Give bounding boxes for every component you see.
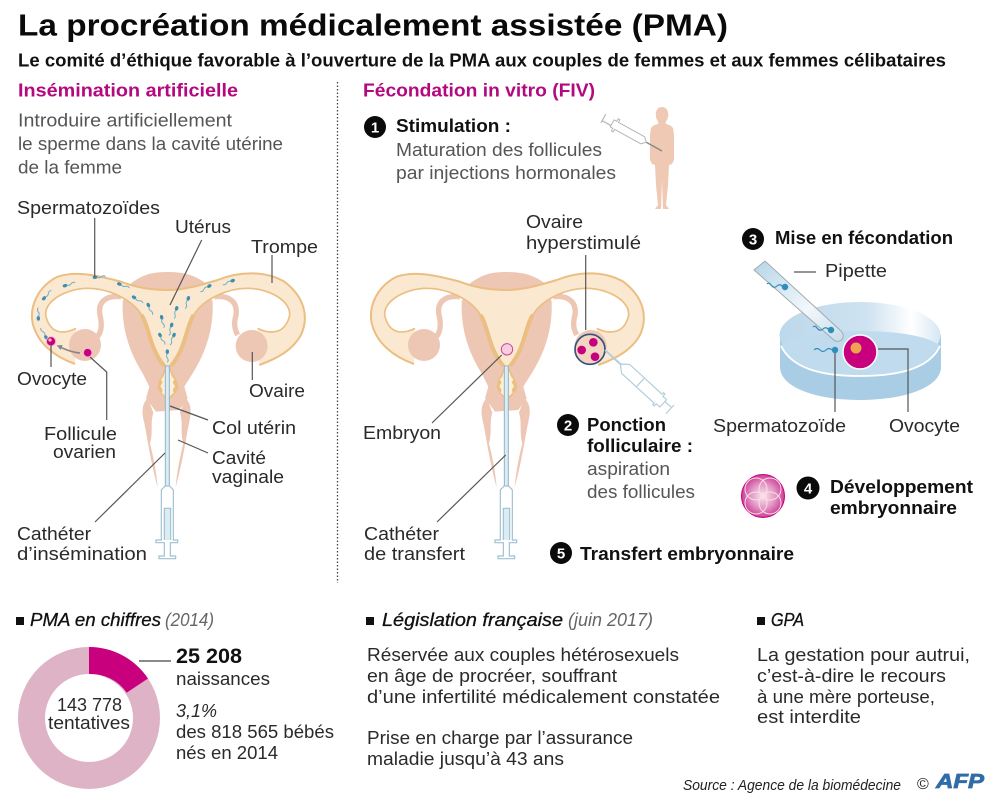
leader lines: insémination — [51, 218, 272, 522]
heading: législation française: (juin 2017) — [568, 610, 653, 630]
step 4: développement embryonnaire: embryonnaire — [830, 497, 957, 518]
heading: insémination artificielle: Insémination artificielle — [18, 80, 238, 100]
text block: législation: Réservée aux couples hétérosexuels — [367, 644, 679, 665]
labels: insémination diagram: Ovocyte — [17, 368, 87, 389]
step 3: mise en fécondation heading: 3 — [749, 232, 757, 248]
text block: législation: maladie jusqu’à 43 ans — [367, 748, 564, 769]
logo: AFP: AFP — [935, 771, 985, 793]
stats text: nés en 2014 — [176, 742, 278, 763]
stats text: des 818 565 bébés — [176, 721, 334, 742]
heading: fécondation in vitro: Fécondation in vitro (FIV) — [363, 80, 595, 100]
step 4: développement embryonnaire: 4 — [804, 480, 813, 498]
text block: insémination description: de la femme — [18, 156, 122, 178]
dotted divider — [336, 82, 338, 583]
labels: insémination diagram: Trompe — [251, 236, 318, 257]
text block: insémination description — [18, 110, 283, 178]
step 1: stimulation: par injections hormonales — [396, 162, 616, 183]
sperm cells and ovocyte — [37, 275, 235, 362]
stats text: 25 208 — [176, 645, 242, 668]
donut chart — [32, 647, 171, 776]
donut chart: 143 778 — [57, 694, 122, 715]
leader lines: FIV — [432, 255, 586, 522]
heading: PMA en chiffres: PMA en chiffres — [30, 610, 161, 630]
icon: embryo — [742, 474, 784, 518]
labels: insémination diagram: Cathéter — [17, 523, 91, 544]
labels: FIV diagram — [363, 211, 641, 564]
labels: insémination diagram: d’insémination — [17, 543, 147, 564]
labels: FIV diagram: de transfert — [364, 543, 465, 564]
labels: insémination diagram: Follicule — [44, 423, 117, 444]
step 2: ponction folliculaire: folliculaire : — [587, 435, 693, 456]
text block: GPA — [757, 644, 970, 727]
title: La procréation médicalement assistée (PMA) — [18, 8, 728, 42]
step 4: développement embryonnaire: Développement — [830, 476, 973, 497]
icon: hormone syringe — [600, 112, 665, 157]
text block: législation — [367, 644, 720, 769]
step 2: ponction folliculaire: des follicules — [587, 481, 695, 502]
icon: body silhouette — [650, 107, 674, 209]
text block: GPA: La gestation pour autrui, — [757, 644, 970, 665]
text block: GPA: est interdite — [757, 706, 861, 727]
text block: GPA: c’est-à-dire le recours — [757, 665, 946, 686]
subtitle: Le comité d’éthique favorable à l’ouverture de la PMA aux couples de femmes et aux femmes célibataires — [18, 50, 946, 70]
labels: insémination diagram: Cavité — [212, 447, 266, 468]
labels: insémination diagram: Col utérin — [212, 417, 296, 438]
labels: dish: Pipette — [825, 260, 887, 281]
step 2: ponction folliculaire: aspiration — [587, 458, 670, 479]
text block: législation: Prise en charge par l’assurance — [367, 727, 633, 748]
labels: dish — [713, 260, 960, 436]
labels: insémination diagram — [17, 197, 318, 564]
labels: FIV diagram: hyperstimulé — [526, 232, 641, 253]
labels: insémination diagram: Ovaire — [249, 380, 305, 401]
text block: insémination description: le sperme dans la cavité utérine — [18, 133, 283, 154]
stats text — [176, 645, 334, 763]
labels: insémination diagram: Utérus — [175, 216, 231, 237]
heading: législation française — [366, 610, 653, 630]
diagram: FIV uterus — [371, 272, 644, 559]
heading: PMA en chiffres: (2014) — [165, 610, 214, 630]
text block: GPA: à une mère porteuse, — [757, 686, 935, 707]
leader lines: dish — [794, 272, 908, 412]
step 2: ponction folliculaire: Ponction — [587, 414, 666, 435]
heading: PMA en chiffres — [16, 610, 214, 630]
step 1: stimulation: Stimulation : — [396, 115, 511, 136]
step 1: stimulation: 1 — [371, 120, 379, 136]
text block: législation: en âge de procréer, souffrant — [367, 665, 617, 686]
labels: dish: Ovocyte — [889, 415, 960, 436]
logo: AFP: © — [917, 776, 929, 793]
step 4: développement embryonnaire — [796, 476, 973, 518]
labels: insémination diagram: vaginale — [212, 466, 284, 487]
step 1: stimulation — [364, 115, 616, 183]
step 5: transfert embryonnaire: 5 — [557, 546, 565, 562]
labels: dish: Spermatozoïde — [713, 415, 846, 436]
stats text: naissances — [176, 668, 270, 689]
icon: follicle aspiration syringe — [600, 344, 675, 415]
petri dish with pipette — [754, 261, 941, 400]
source: Source : Agence de la biomédecine — [683, 778, 901, 794]
stats text: 3,1% — [176, 700, 217, 721]
step 2: ponction folliculaire: 2 — [564, 418, 572, 434]
text block: insémination description: Introduire artificiellement — [18, 110, 232, 130]
heading: GPA: GPA — [771, 610, 804, 630]
labels: insémination diagram: Spermatozoïdes — [17, 197, 160, 218]
heading: GPA — [757, 610, 804, 630]
labels: insémination diagram: ovarien — [53, 441, 116, 462]
logo: AFP — [917, 771, 985, 793]
donut chart: tentatives — [48, 712, 130, 733]
embryo and stimulated ovary — [501, 334, 605, 364]
labels: FIV diagram: Embryon — [363, 422, 441, 443]
labels: FIV diagram: Cathéter — [364, 523, 439, 544]
step 5: transfert embryonnaire: Transfert embryonnaire — [580, 543, 794, 564]
diagram: insémination uterus — [32, 272, 305, 559]
step 2: ponction folliculaire — [557, 414, 695, 502]
heading: législation française: Législation française — [382, 610, 563, 630]
step 1: stimulation: Maturation des follicules — [396, 139, 602, 160]
labels: FIV diagram: Ovaire — [526, 211, 583, 232]
text block: législation: d’une infertilité médicalement constatée — [367, 686, 720, 707]
step 3: mise en fécondation heading: Mise en fécondation — [775, 227, 953, 248]
